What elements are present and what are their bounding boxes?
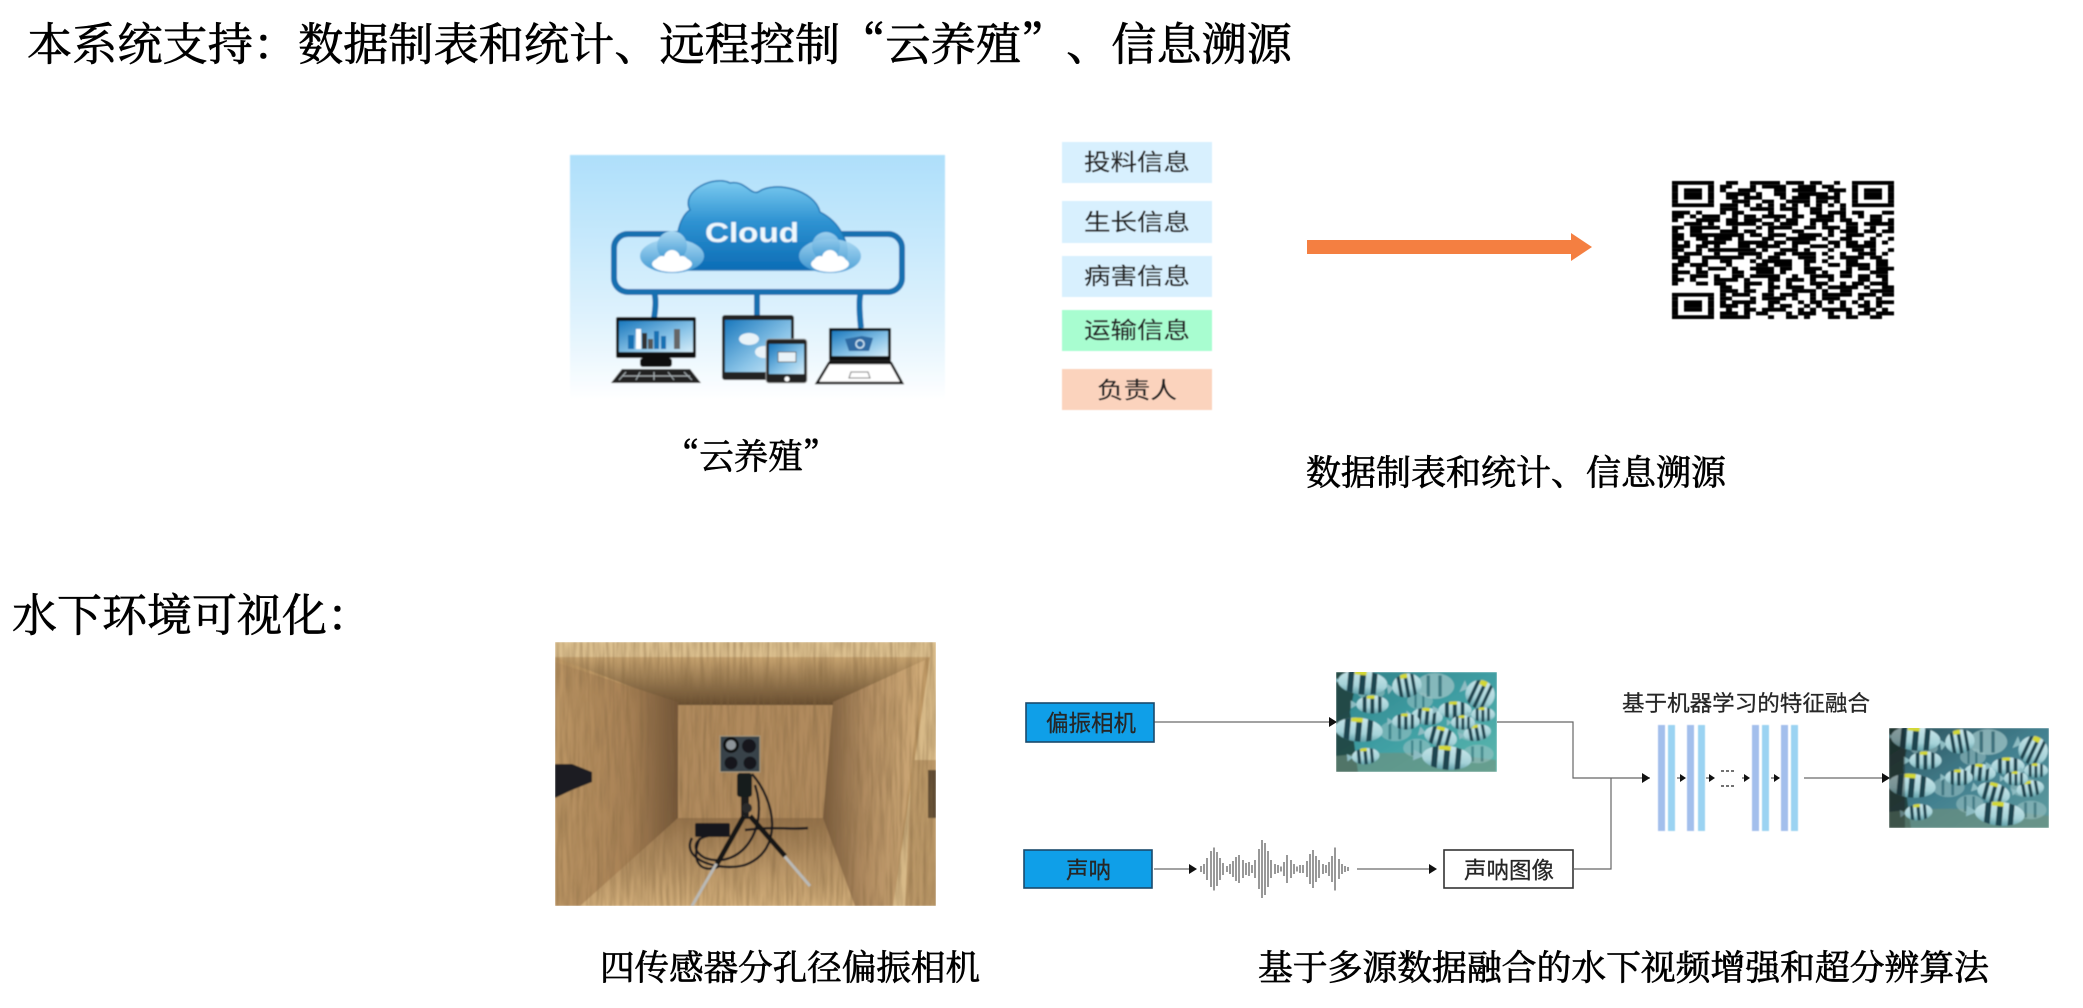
- item: disease info: 病害信息: [1084, 263, 1190, 289]
- image: raw underwater fish: [1336, 672, 1497, 772]
- box: sonar: [1024, 850, 1152, 888]
- small cloud left: [640, 231, 704, 273]
- cloud: [666, 181, 847, 270]
- network layers: [1658, 725, 1798, 831]
- item: growth info: [1062, 201, 1212, 243]
- panel: traceability info list: [1062, 142, 1212, 410]
- small arrows between layers: [1677, 774, 1780, 782]
- item: transport info: 运输信息: [1084, 317, 1190, 343]
- icon: tablet and phone: [722, 315, 807, 383]
- caption: four-sensor polarization camera: 四传感器分孔径偏振相机: [600, 941, 980, 991]
- item: person in charge: [1062, 369, 1212, 410]
- arrow: camera to raw image: [1154, 717, 1337, 727]
- image: enhanced underwater fish: [1889, 728, 2049, 828]
- cloud label: Cloud: [705, 217, 799, 248]
- arrowhead: into fusion network: [1642, 773, 1650, 783]
- box: polarization camera: 偏振相机: [1046, 710, 1136, 736]
- heading: underwater visualization: 水下环境可视化：: [12, 579, 372, 644]
- icon: desktop computer: [611, 317, 701, 383]
- ellipsis dots: [1721, 771, 1734, 786]
- icon: laptop: [817, 328, 902, 383]
- box: sonar image: [1444, 850, 1573, 888]
- item: feed info: [1062, 142, 1212, 183]
- item: person in charge: 负责人: [1097, 377, 1177, 403]
- heading: machine-learning feature fusion: 基于机器学习的特征融合: [1622, 691, 1870, 716]
- arrow: orange to QR code: [1307, 233, 1592, 261]
- item: growth info: 生长信息: [1084, 209, 1190, 235]
- illustration background: [570, 155, 945, 413]
- waveform: sonar signal: [1201, 840, 1348, 898]
- arrow: sonar to waveform: [1154, 864, 1197, 874]
- box: polarization camera: [1026, 703, 1154, 742]
- network frame: [614, 234, 902, 328]
- box: sonar image: 声呐图像: [1464, 857, 1554, 883]
- arrow: waveform to sonar image: [1357, 864, 1437, 874]
- caption: fusion enhancement algorithm: 基于多源数据融合的水下视频增强和超分辨算法: [1258, 941, 1990, 991]
- item: disease info: [1062, 256, 1212, 297]
- photo: polarization camera in wooden box: [555, 642, 936, 906]
- caption: data tabulation and traceability: 数据制表和统计、信息溯源: [1306, 446, 1727, 496]
- title: 本系统支持：数据制表和统计、远程控制“云养殖”、信息溯源: [27, 8, 1293, 73]
- connector: sonar image to fusion: [1573, 778, 1611, 869]
- connector: raw image to fusion: [1497, 722, 1650, 778]
- small cloud right: [799, 232, 861, 273]
- flow diagram: multi-source fusion: [1024, 667, 2053, 898]
- item: feed info: 投料信息: [1084, 149, 1190, 175]
- arrow: network to enhanced image: [1804, 773, 1890, 783]
- item: transport info: [1062, 310, 1212, 351]
- icon: QR code: [1672, 183, 1894, 317]
- box: sonar: 声呐: [1066, 857, 1111, 883]
- panel: cloud farming illustration: [570, 155, 945, 413]
- caption: cloud farming: “云养殖”: [665, 430, 837, 480]
